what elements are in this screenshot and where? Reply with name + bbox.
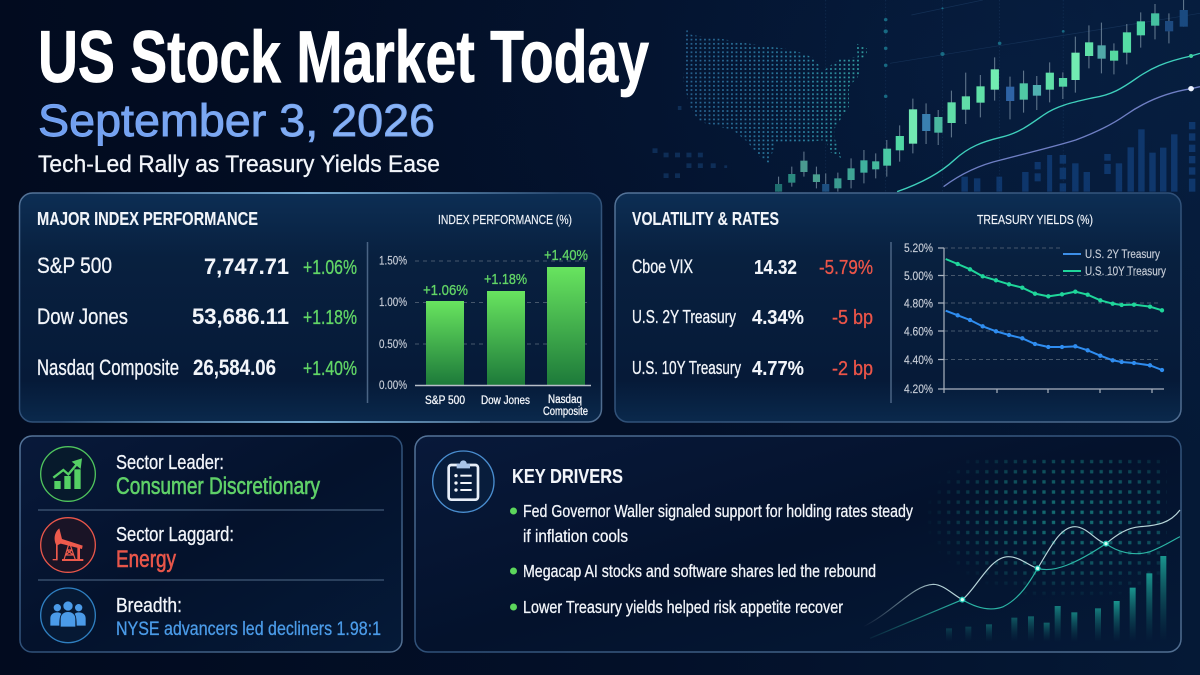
row: S&P 500: S&P 500 [37,253,112,278]
bar chart: index performance: 1.00% [379,295,407,309]
row: U.S. 2Y Treasury: U.S. 2Y Treasury [632,307,736,327]
icon: clipboard checklist [433,451,494,512]
bar chart: index performance: S&P 500 [425,393,465,407]
bullet: Fed Governor Waller: Fed Governor Waller signaled support for holding rates steady [523,501,913,521]
tagline: Tech-Led Rally as Treasury Yields Ease [38,151,440,178]
bar chart: index performance: Nasdaq [548,394,582,406]
line chart: treasury yields: 4.80% [904,296,933,310]
text: sector laggard: Energy [116,546,176,573]
icon: people [41,588,95,643]
panel: volatility and rates [615,193,1181,422]
date subtitle: September 3, 2026 [38,95,435,146]
row: U.S. 10Y Treasury: U.S. 10Y Treasury [632,358,741,378]
panel: major index performance [20,193,602,422]
icon: rising chart [41,447,95,501]
text: sector leader [116,452,320,500]
bar chart: index performance: +1.40% [544,247,588,264]
bar chart: index performance: +1.06% [423,282,468,299]
bar chart: index performance: Composite [543,406,588,418]
row: Cboe VIX: 14.32 [754,257,797,279]
title: US Stock Market Today [38,17,649,98]
line chart: treasury yields: 4.20% [904,382,933,396]
bar chart: index performance: 1.50% [379,254,407,268]
line chart: treasury yields: 5.20% [904,241,933,255]
line chart: treasury yields: 4.60% [904,324,933,338]
panel: sector summary [20,436,402,652]
bar chart: index performance: INDEX PERFORMANCE (%) [438,213,572,227]
legend [1063,249,1166,278]
line chart: treasury yields [891,213,1166,403]
bar chart: index performance [368,213,591,418]
heading: major index performance: MAJOR INDEX PERFORMANCE [37,209,258,229]
decoration: dotted network chart [863,455,1180,642]
bar chart: index performance: 0.00% [379,378,407,392]
row: U.S. 2Y Treasury: -5 bp [832,307,873,329]
row: U.S. 2Y Treasury: 4.34% [752,307,804,329]
text: breadth [116,595,381,640]
row: Cboe VIX: -5.79% [819,257,873,279]
row: Cboe VIX [632,257,873,279]
heading: key drivers: KEY DRIVERS [512,466,623,488]
row: U.S. 10Y Treasury: -2 bp [832,358,873,380]
text: sector laggard [116,524,234,573]
bullet: Fed Governor Waller: if inflation cools [523,526,628,546]
row: S&P 500: 7,747.71 [204,254,289,279]
row: S&P 500 [37,253,357,279]
icon: oil pump [41,518,95,572]
bullet: Lower Treasury yields: Lower Treasury yields helped risk appetite recover [523,597,843,617]
row: U.S. 10Y Treasury: 4.77% [752,358,804,380]
line chart: treasury yields: TREASURY YIELDS (%) [977,213,1093,227]
row: Dow Jones: 53,686.11 [192,304,289,329]
row: Dow Jones [37,304,357,329]
text: breadth: NYSE advancers led decliners 1.98:1 [116,618,381,640]
line chart: treasury yields: 4.40% [904,353,933,367]
row: S&P 500: +1.06% [303,257,357,279]
bar chart: index performance: 0.50% [379,337,407,351]
row: U.S. 2Y Treasury [632,307,873,329]
line chart: treasury yields: 5.00% [904,269,933,283]
row: Cboe VIX: Cboe VIX [632,257,693,278]
bullet: Megacap AI stocks: Megacap AI stocks and software shares led the rebound [523,561,876,581]
legend: U.S. 2Y Treasury [1085,249,1160,261]
row: Dow Jones: Dow Jones [37,304,128,329]
row: Dow Jones: +1.18% [303,307,357,329]
panel: key drivers [415,436,1181,652]
bullet: Fed Governor Waller [510,501,913,546]
header chart decoration: US dot map and rising candlesticks [652,0,1200,192]
text: sector leader: Consumer Discretionary [116,473,320,500]
row: Nasdaq Composite: 26,584.06 [193,355,276,380]
bar chart: index performance: Dow Jones [481,393,530,407]
text: sector leader: Sector Leader: [116,452,224,474]
row: Nasdaq Composite [37,355,357,380]
heading: volatility and rates: VOLATILITY & RATES [632,209,779,229]
row: U.S. 10Y Treasury [632,358,873,380]
text: breadth: Breadth: [116,595,182,617]
legend: U.S. 10Y Treasury [1085,266,1166,278]
text: sector laggard: Sector Laggard: [116,524,234,546]
row: Nasdaq Composite: +1.40% [303,358,357,380]
bar chart: index performance: +1.18% [484,271,527,288]
row: Nasdaq Composite: Nasdaq Composite [37,355,179,380]
